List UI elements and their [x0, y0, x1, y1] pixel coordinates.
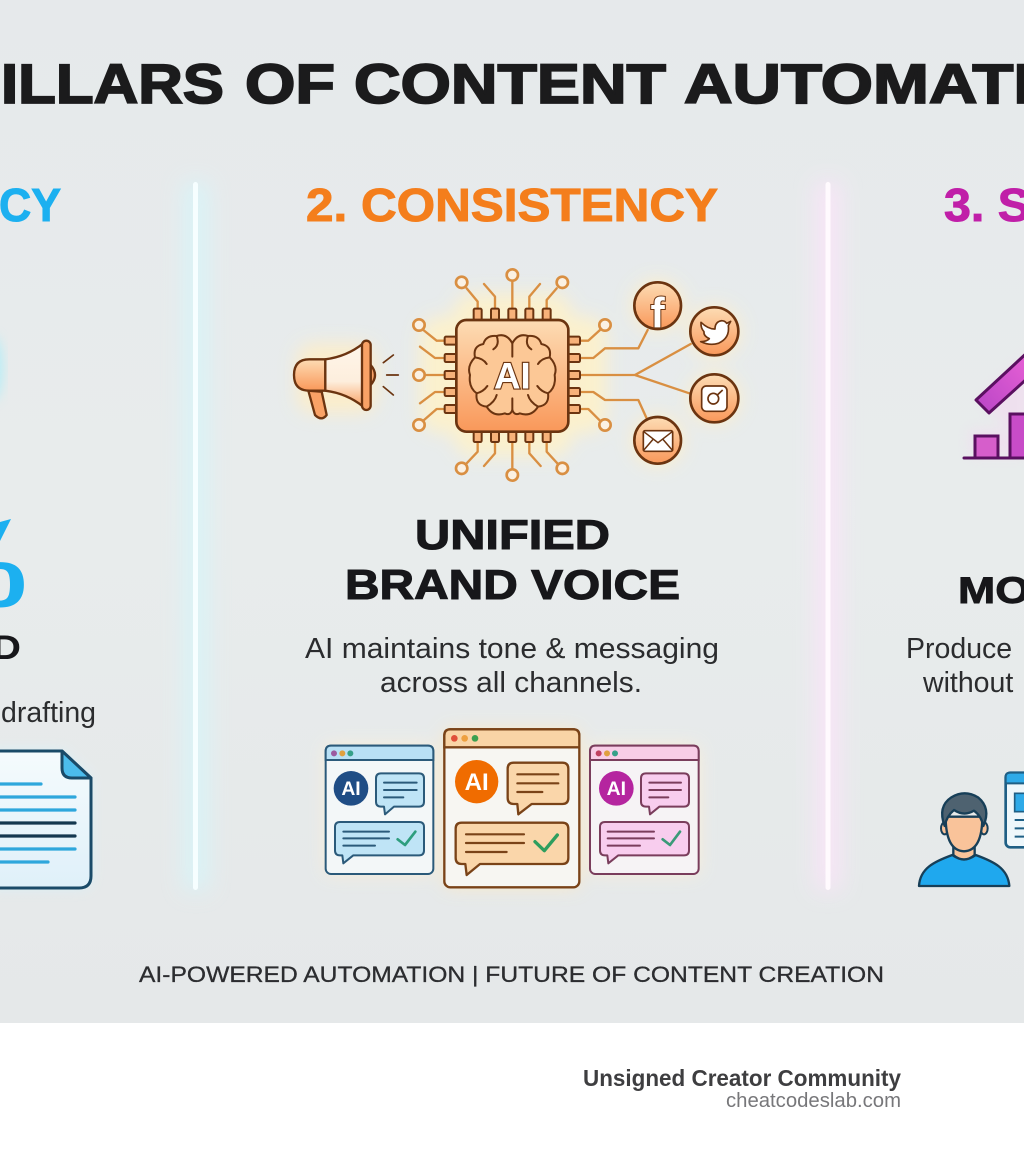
heading: efficiency: CY [0, 179, 61, 231]
subheading: more: MO [958, 570, 1024, 611]
title: OF [245, 52, 335, 115]
description: consistency: across all channels. [380, 667, 642, 699]
window: orange chat: AI [465, 769, 489, 796]
window: blue chat: AI [341, 779, 361, 800]
social icon: facebook [634, 282, 681, 338]
footer strapline: AI-POWERED AUTOMATION | FUTURE OF CONTENT CREATION [139, 962, 884, 987]
title [1, 52, 1024, 115]
description: scalability: Produce [906, 633, 1012, 665]
subheading: unified brand voice [345, 511, 680, 608]
heading: scalability: 3. S [944, 179, 1024, 231]
panel: efficiency (clipped left column) [0, 179, 96, 888]
window: orange chat [444, 729, 579, 887]
brand credit: Unsigned Creator Community [583, 1065, 901, 1091]
title: CONTENT [354, 52, 666, 115]
circuit traces [413, 269, 691, 481]
window: blue chat [326, 746, 433, 874]
chip glow [297, 280, 740, 466]
divider: pink glow [816, 182, 840, 890]
description: efficiency: drafting [1, 697, 96, 729]
chip label AI: AI [494, 355, 531, 396]
icon: AI chip with megaphone and social channels [294, 269, 740, 481]
panel: consistency [294, 179, 740, 887]
divider: cyan glow [184, 182, 208, 890]
subheading: unified brand voice: BRAND VOICE [345, 561, 680, 608]
title: AUTOMATI [684, 52, 1024, 115]
icon glow: efficiency icon edge [0, 336, 2, 400]
icon: growth chart [964, 350, 1024, 458]
social icon: instagram [690, 374, 738, 422]
icon: document [0, 751, 91, 888]
social icon: email [634, 417, 681, 464]
panel: scalability (clipped right column) [906, 179, 1024, 886]
window: pink chat [590, 746, 699, 874]
description: scalability [906, 633, 1013, 699]
social icon: facebook: f [651, 290, 666, 338]
brand credit: cheatcodeslab.com [726, 1090, 901, 1112]
icon: content window [1006, 773, 1024, 847]
chip pins [445, 309, 580, 442]
icon: megaphone [294, 341, 398, 418]
window glow [326, 729, 699, 887]
title: ILLARS [1, 52, 224, 115]
subheading: unified brand voice: UNIFIED [415, 511, 610, 558]
brain [469, 335, 556, 414]
stat mark: clipped slash [0, 519, 11, 541]
brand credit [583, 1065, 901, 1112]
heading: consistency: 2. CONSISTENCY [306, 179, 718, 231]
chat windows row [326, 729, 699, 887]
social icon: twitter [690, 307, 738, 355]
chip body [456, 320, 568, 432]
icon: person [919, 793, 1009, 886]
window: pink chat: AI [607, 779, 626, 800]
description: consistency: AI maintains tone & messaging [305, 633, 719, 665]
description: consistency [305, 633, 719, 699]
description: scalability: without [922, 667, 1013, 699]
